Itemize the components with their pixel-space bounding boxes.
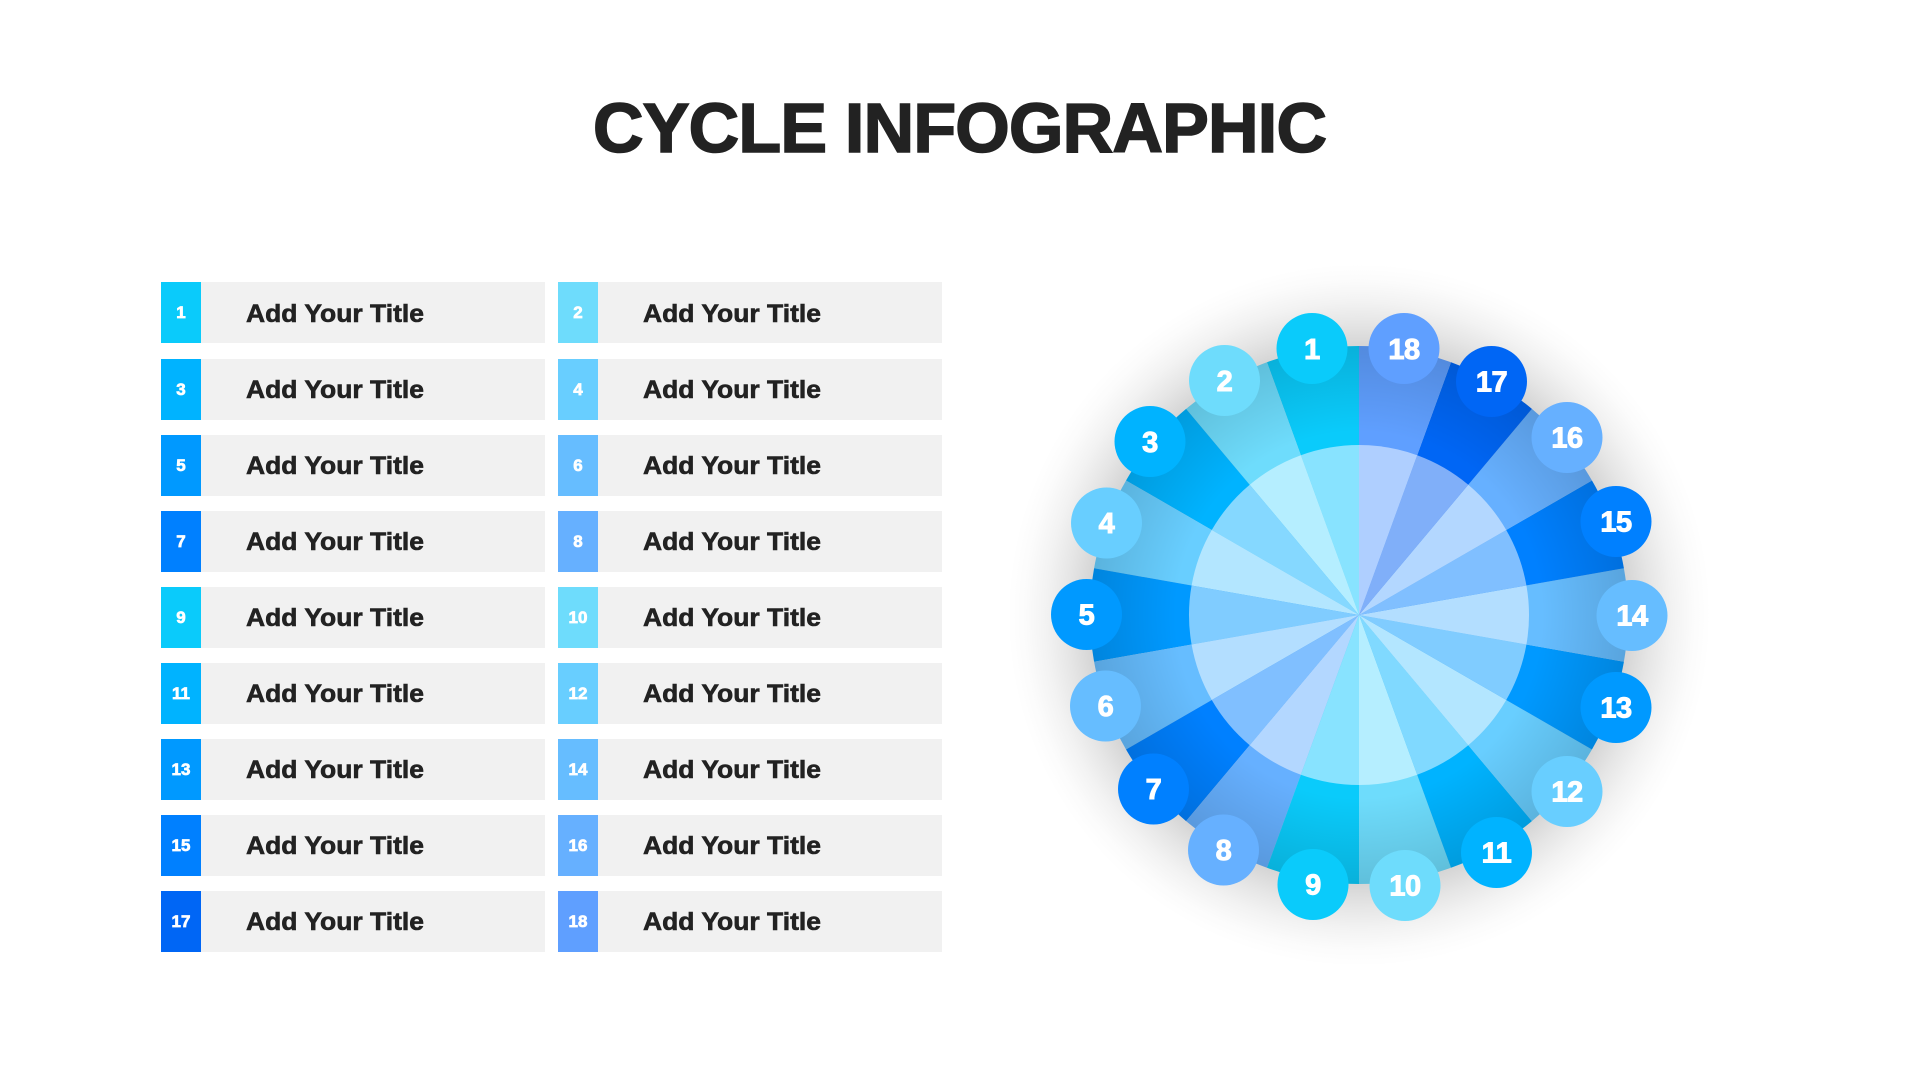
list row 8: Add Your Title (643, 528, 821, 556)
badge 9: 9 (1305, 870, 1321, 902)
badge 5 (1051, 579, 1122, 650)
list row 16: 16 (569, 836, 587, 855)
list row 13: Add Your Title (246, 756, 424, 784)
list row 9 (161, 587, 545, 648)
list row 13 (161, 739, 545, 800)
badge 6 (1070, 670, 1141, 742)
list row 4: Add Your Title (643, 376, 821, 404)
panel: numbered title list (161, 282, 942, 952)
badge 17 (1456, 346, 1527, 417)
list row 12: 12 (569, 684, 587, 703)
list row 6: Add Your Title (643, 452, 821, 480)
badge 4 (1071, 488, 1142, 558)
badge 17: 17 (1476, 366, 1507, 398)
list row 5: 5 (176, 456, 186, 475)
badge 11: 11 (1482, 838, 1512, 870)
list row 15 (161, 815, 545, 876)
badge 5: 5 (1079, 600, 1095, 632)
list row 15: 15 (172, 836, 190, 855)
list row 9: Add Your Title (246, 604, 424, 632)
list row 18: Add Your Title (643, 908, 821, 936)
badge 13: 13 (1600, 692, 1632, 724)
cycle wheel chart (1007, 263, 1711, 967)
inner wheel slices (1181, 435, 1537, 795)
badge 8: 8 (1216, 835, 1232, 867)
list row 3 (161, 359, 545, 420)
badge 12: 12 (1551, 776, 1583, 808)
list row 6: 6 (573, 456, 583, 475)
list row 7: 7 (176, 532, 186, 551)
wheel drop shadow (1007, 263, 1711, 967)
badge 13 (1580, 672, 1652, 743)
badge 16: 16 (1551, 422, 1583, 454)
list row 11: Add Your Title (246, 680, 424, 708)
list row 2: 2 (573, 303, 583, 322)
list row 18: 18 (569, 912, 587, 931)
list row 1: Add Your Title (246, 300, 424, 328)
badge 18 (1368, 313, 1440, 384)
badge 14 (1596, 580, 1668, 651)
list row 1 (161, 282, 545, 343)
badge 14: 14 (1616, 600, 1648, 632)
list row 3: Add Your Title (246, 376, 424, 404)
list row 13: 13 (172, 760, 190, 779)
list row 14: 14 (569, 760, 588, 779)
badge 18: 18 (1388, 334, 1420, 366)
list row 7: Add Your Title (246, 528, 424, 556)
badge 8 (1188, 814, 1259, 886)
list row 17: 17 (172, 912, 190, 931)
badge 12 (1532, 756, 1602, 827)
list row 5 (161, 435, 545, 496)
list row 4: 4 (573, 380, 583, 399)
badge 2 (1189, 345, 1260, 416)
list row 7 (161, 511, 545, 572)
badge 15 (1580, 486, 1652, 557)
outer rim shading (1090, 346, 1628, 884)
list row 9: 9 (176, 608, 186, 627)
list row 6 (558, 435, 942, 496)
list row 8: 8 (573, 532, 583, 551)
list row 4 (558, 359, 942, 420)
list row 11 (161, 663, 545, 724)
list row 12: Add Your Title (643, 680, 821, 708)
wheel number badges (1051, 313, 1668, 921)
badge 1 (1276, 313, 1348, 384)
badge 15: 15 (1600, 506, 1632, 538)
list row 10: 10 (569, 608, 587, 627)
list row 18 (558, 891, 942, 952)
list row 2: Add Your Title (643, 300, 821, 328)
list row 17: Add Your Title (246, 908, 424, 936)
badge 11 (1461, 817, 1532, 888)
list row 14 (558, 739, 942, 800)
badge 10: 10 (1389, 870, 1421, 902)
badge 3 (1114, 406, 1186, 477)
list row 14: Add Your Title (643, 756, 821, 784)
badge 7: 7 (1146, 774, 1161, 806)
list row 12 (558, 663, 942, 724)
list row 11: 11 (172, 684, 190, 703)
badge 7 (1118, 754, 1189, 824)
list row 16 (558, 815, 942, 876)
list row 1: 1 (176, 303, 186, 322)
badge 9 (1278, 849, 1348, 920)
list row 16: Add Your Title (643, 832, 821, 860)
list row 3: 3 (176, 380, 186, 399)
list row 8 (558, 511, 942, 572)
badge 16 (1532, 402, 1602, 473)
badge 1: 1 (1304, 334, 1320, 366)
list row 15: Add Your Title (246, 832, 424, 860)
badge 3: 3 (1142, 427, 1158, 459)
list row 2 (558, 282, 942, 343)
badge 10 (1370, 850, 1440, 921)
badge 4: 4 (1099, 508, 1115, 540)
list row 10: Add Your Title (643, 604, 821, 632)
list row 17 (161, 891, 545, 952)
list row 10 (558, 587, 942, 648)
badge 2: 2 (1217, 366, 1232, 398)
badge 6: 6 (1098, 691, 1114, 723)
list row 5: Add Your Title (246, 452, 424, 480)
title: CYCLE INFOGRAPHIC (593, 89, 1327, 167)
outer wheel slices (1078, 331, 1640, 899)
